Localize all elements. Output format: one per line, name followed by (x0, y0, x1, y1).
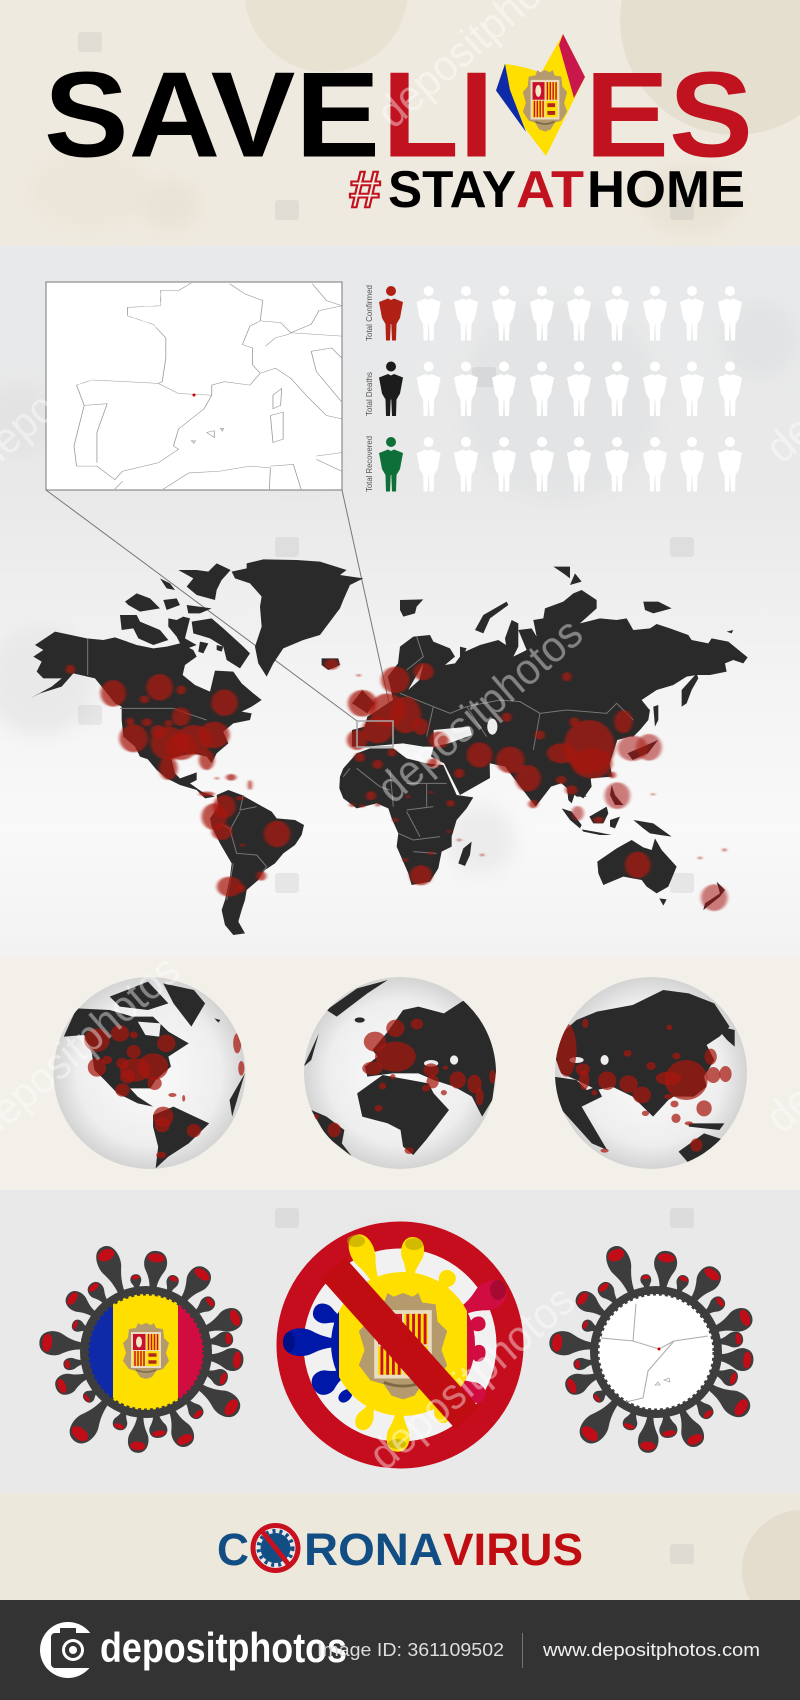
North America and Greenland (30, 559, 363, 763)
label: Total Recovered: Total Recovered (364, 436, 374, 492)
icon: mini no-virus O (253, 1526, 298, 1570)
subtitle: #STAYATHOME: AT (516, 161, 584, 219)
person: recovered (379, 437, 403, 492)
subtitle: #STAYATHOME (349, 161, 745, 219)
title: SAVE LIVES: SAVE (44, 46, 380, 182)
world map (30, 559, 748, 935)
footer logo text: depositphotos (100, 1624, 347, 1671)
South America, Central America, Africa (135, 747, 473, 935)
label: Total Confirmed: Total Confirmed (364, 285, 374, 341)
icon: virus with Andorra flag (38, 1242, 246, 1454)
subtitle: #STAYATHOME: STAY (388, 161, 516, 219)
inset locator box on world map (357, 721, 393, 747)
islands, seas and hotspots (66, 659, 728, 911)
virus body (331, 1272, 475, 1416)
title: SAVE LIVES: ES (585, 46, 753, 182)
icon: Andorra flag heart (496, 34, 585, 156)
person: confirmed (379, 286, 403, 340)
title: SAVE LIVES: LI (382, 46, 494, 182)
heading: CORONAVIRUS: VIRUS (443, 1524, 583, 1575)
connector lines from inset to world map (46, 490, 393, 721)
website url: www.depositphotos.com (542, 1640, 760, 1660)
Southeast Asia and Oceania (553, 767, 725, 910)
globe: Europe and Africa (304, 977, 497, 1169)
person: deaths (379, 362, 403, 416)
globe: Americas (54, 977, 246, 1169)
heading: CORONAVIRUS: RONA (304, 1524, 443, 1575)
globe: Asia and Australia (554, 977, 747, 1169)
icon: no-virus prohibition sign (283, 1230, 512, 1455)
icon: virus with Andorra map (548, 1242, 756, 1454)
white people grid (417, 286, 742, 492)
Eurasia (352, 567, 748, 807)
panel: inset map of Andorra region (46, 282, 342, 490)
coat of arms (359, 1293, 447, 1399)
watermarks: depositphotos (359, 1275, 584, 1480)
footer bar (0, 1600, 800, 1700)
image id: Image ID: 361109502 (317, 1640, 504, 1660)
subtitle: #STAYATHOME: HOME (587, 161, 745, 219)
heading: CORONAVIRUS (217, 1524, 583, 1575)
heading: CORONAVIRUS: C (217, 1524, 249, 1575)
label: Total Deaths: Total Deaths (364, 372, 374, 416)
panel: pictogram rows (364, 285, 742, 492)
watermarks: depositphotos (367, 608, 592, 813)
virus spikes in flag colours (283, 1230, 512, 1452)
prohibition bar (333, 1268, 467, 1418)
title: SAVE LIVES (44, 46, 753, 182)
logo: camera (40, 1622, 96, 1678)
subtitle: #STAYATHOME: # (349, 161, 381, 219)
